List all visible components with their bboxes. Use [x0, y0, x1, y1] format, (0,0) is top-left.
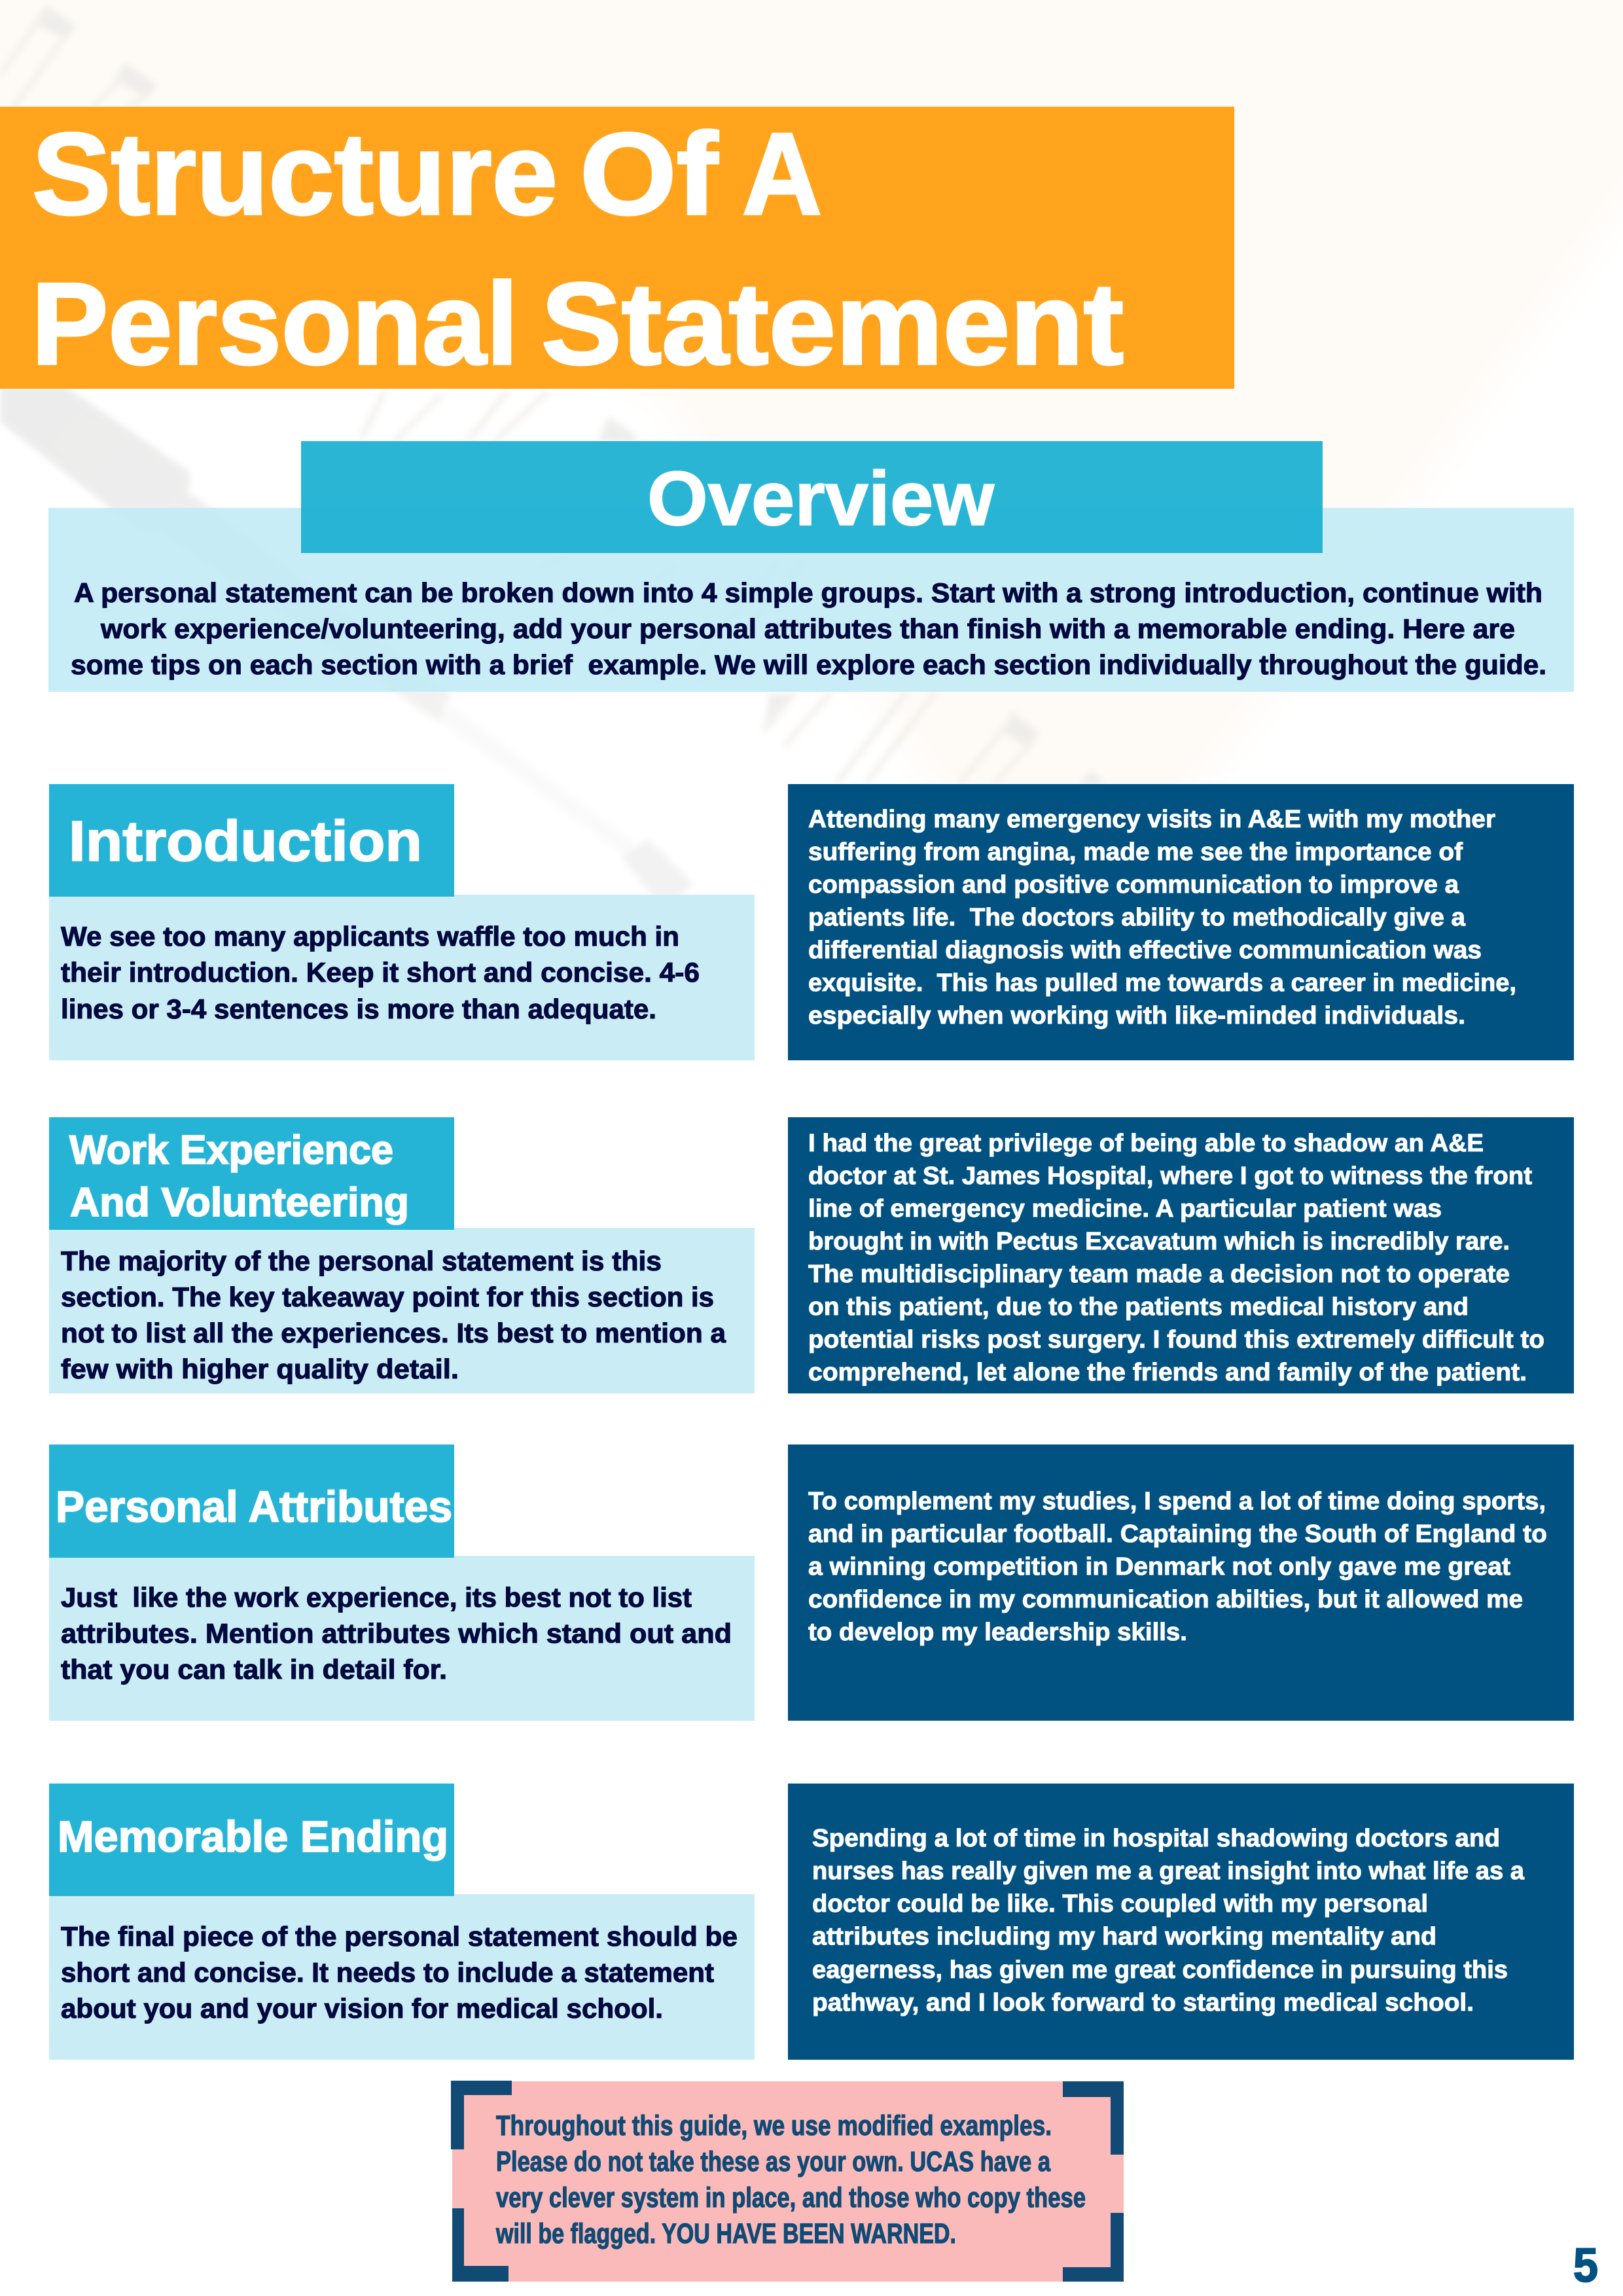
warning text: Throughout this guide, we use modified examples.: [496, 2110, 1052, 2142]
example: personal attributes: a winning competition in Denmark not only gave me great: [808, 1553, 1510, 1581]
example: memorable ending: doctor could be like. This coupled with my personal: [812, 1890, 1428, 1918]
memorable ending heading: [49, 1784, 454, 1896]
work experience body: not to list all the experiences. Its best to mention a: [61, 1318, 726, 1348]
title: A: [742, 109, 822, 239]
example: introduction: especially when working with like-minded individuals.: [808, 1002, 1465, 1030]
title: Structure: [32, 109, 558, 239]
example: personal attributes: and in particular football. Captaining the South of England to: [808, 1520, 1547, 1548]
panel: personal attributes: [49, 1444, 755, 1721]
panel: work experience and volunteering: [49, 1117, 755, 1393]
example: work experience: I had the great privilege of being able to shadow an A&E: [808, 1130, 1484, 1157]
example: work experience: The multidisciplinary team made a decision not to operate: [808, 1261, 1510, 1288]
example: introduction: [788, 784, 1574, 1060]
memorable ending body: [49, 1894, 755, 2060]
overview heading bar: [301, 441, 1323, 553]
pen: [0, 386, 694, 911]
introduction heading: [49, 784, 454, 897]
example: introduction: suffering from angina, made me see the importance of: [808, 838, 1463, 866]
example: work experience: on this patient, due to the patients medical history and: [808, 1293, 1469, 1321]
introduction body: lines or 3-4 sentences is more than adequate.: [61, 994, 656, 1024]
example: work experience: [788, 1117, 1574, 1393]
background photo: notebook, rings and pen: [0, 0, 1623, 911]
work experience body: The majority of the personal statement is this: [61, 1246, 662, 1276]
work experience body: few with higher quality detail.: [61, 1354, 459, 1384]
page number: 5: [1573, 2239, 1598, 2292]
example: memorable ending: pathway, and I look forward to starting medical school.: [812, 1989, 1474, 2017]
memorable ending body: short and concise. It needs to include a statement: [61, 1957, 714, 1988]
title: Of: [580, 109, 719, 239]
example: work experience: doctor at St. James Hospital, where I got to witness the front: [808, 1162, 1532, 1190]
overview body panel: [48, 508, 1574, 692]
overview text: some tips on each section with a brief example. We will explore each section individually throughout the guide.: [71, 649, 1546, 680]
overview text: work experience/volunteering, add your personal attributes than finish with a memorable ending. Here are: [100, 613, 1515, 644]
corner brackets: [451, 2081, 1124, 2282]
personal attributes body: Just like the work experience, its best not to list: [61, 1582, 692, 1613]
title: [31, 109, 1124, 389]
example: introduction: Attending many emergency visits in A&E with my mother: [808, 806, 1495, 833]
example: personal attributes: [788, 1444, 1574, 1721]
work experience heading: Work Experience: [69, 1128, 393, 1173]
warning callout: [451, 2081, 1124, 2282]
personal attributes heading: [49, 1444, 454, 1558]
memorable ending body: The final piece of the personal statement should be: [61, 1921, 738, 1952]
example: personal attributes: To complement my studies, I spend a lot of time doing sports,: [808, 1488, 1546, 1515]
memorable ending heading: Memorable Ending: [58, 1812, 448, 1861]
notebook spiral rings: [0, 5, 1106, 784]
notebook page tint: [0, 0, 1623, 877]
example: memorable ending: nurses has really given me a great insight into what life as a: [812, 1857, 1525, 1885]
example: introduction: patients life. The doctors ability to methodically give a: [808, 904, 1466, 931]
personal attributes body: [49, 1556, 755, 1721]
example: introduction: exquisite. This has pulled me towards a career in medicine,: [808, 969, 1516, 997]
personal attributes body: attributes. Mention attributes which stand out and: [61, 1618, 732, 1649]
example: memorable ending: attributes including my hard working mentality and: [812, 1923, 1436, 1950]
warning text: [495, 2110, 1086, 2250]
panel: overview: [48, 441, 1574, 692]
work experience body: section. The key takeaway point for this section is: [61, 1282, 714, 1312]
title: Statement: [541, 259, 1124, 389]
title banner: [0, 107, 1234, 389]
example: memorable ending: Spending a lot of time in hospital shadowing doctors and: [812, 1825, 1500, 1852]
title: Personal: [31, 259, 518, 389]
example: memorable ending: [788, 1784, 1574, 2060]
personal attributes body: that you can talk in detail for.: [61, 1654, 447, 1685]
memorable ending body: about you and your vision for medical school.: [61, 1993, 663, 2024]
warning text: will be flagged. YOU HAVE BEEN WARNED.: [495, 2218, 956, 2250]
example: personal attributes: confidence in my communication abilties, but it allowed me: [808, 1586, 1523, 1613]
warning text: very clever system in place, and those who copy these: [496, 2182, 1086, 2214]
example: introduction: differential diagnosis with effective communication was: [808, 937, 1482, 964]
overview text: A personal statement can be broken down into 4 simple groups. Start with a strong introduction, continue with: [74, 577, 1543, 608]
introduction heading: Introduction: [69, 810, 422, 873]
example: work experience: brought in with Pectus Excavatum which is incredibly rare.: [808, 1228, 1510, 1255]
overview text: [71, 577, 1546, 680]
work experience heading: [49, 1117, 454, 1230]
introduction body: their introduction. Keep it short and concise. 4-6: [61, 957, 700, 988]
example: work experience: potential risks post surgery. I found this extremely difficult to: [808, 1326, 1544, 1354]
example: work experience: comprehend, let alone the friends and family of the patient.: [808, 1359, 1527, 1386]
example: introduction: compassion and positive communication to improve a: [808, 871, 1459, 899]
work experience heading: And Volunteering: [70, 1180, 409, 1225]
warning text: Please do not take these as your own. UCAS have a: [496, 2146, 1051, 2178]
work experience body: [49, 1228, 755, 1393]
personal attributes heading: Personal Attributes: [56, 1482, 452, 1532]
example: work experience: line of emergency medicine. A particular patient was: [808, 1195, 1442, 1223]
panel: introduction: [49, 784, 755, 1060]
panel: memorable ending: [49, 1784, 755, 2060]
example: personal attributes: to develop my leadership skills.: [808, 1619, 1187, 1646]
example: memorable ending: eagerness, has given me great confidence in pursuing this: [812, 1956, 1508, 1984]
introduction body: [49, 895, 755, 1060]
overview heading bar: Overview: [647, 456, 995, 541]
introduction body: We see too many applicants waffle too much in: [61, 921, 679, 952]
